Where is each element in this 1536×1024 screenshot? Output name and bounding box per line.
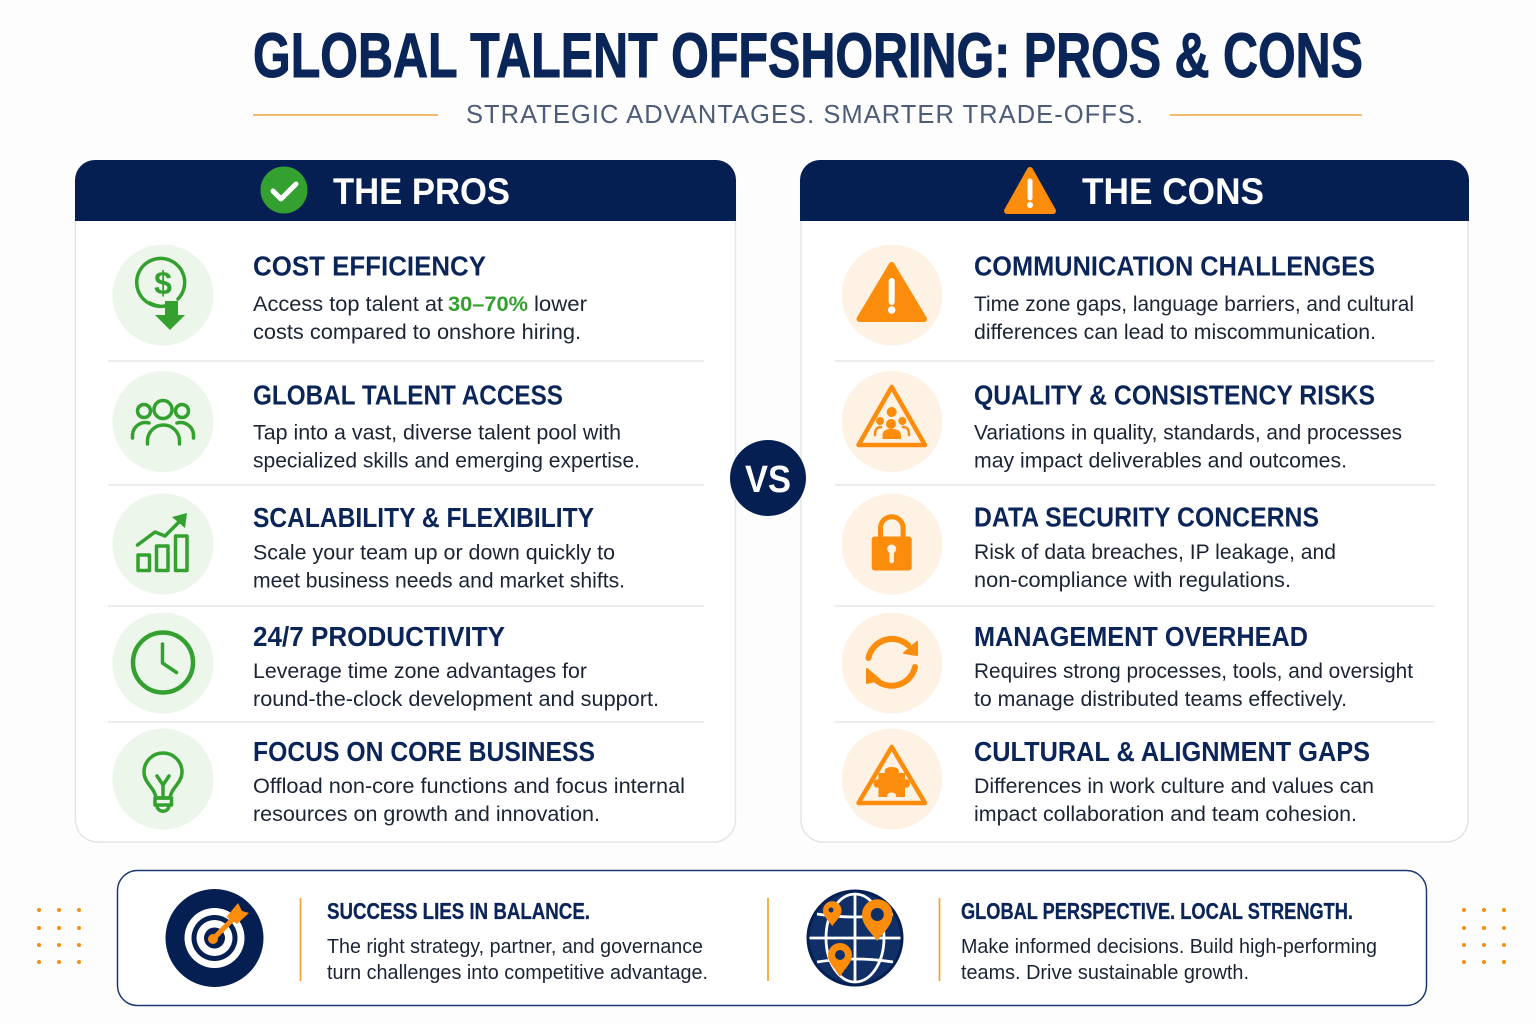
con item: management overhead: MANAGEMENT OVERHEAD [974, 621, 1308, 652]
callout: global perspective, local strength [961, 898, 1377, 984]
pro item: global talent access: Tap into a vast, diverse talent pool with [253, 420, 621, 444]
con item: communication challenges: Time zone gaps, language barriers, and cultural [974, 292, 1414, 316]
panel: the cons [800, 160, 1469, 842]
vs badge [730, 440, 806, 516]
icon: globe with location pins [807, 890, 903, 986]
pros header bar [75, 160, 736, 221]
con item: communication challenges: COMMUNICATION CHALLENGES [974, 250, 1375, 282]
pro item: 24/7 productivity: round-the-clock development and support. [253, 687, 659, 711]
callout: success lies in balance: SUCCESS LIES IN BALANCE. [327, 898, 590, 924]
pros header bar: THE PROS [333, 171, 510, 212]
pro item: 24/7 productivity [112, 612, 659, 714]
con item: data security concerns [842, 494, 1336, 594]
callout: global perspective, local strength: Make informed decisions. Build high-performing [961, 935, 1377, 958]
pro item: cost efficiency: Access top talent at [253, 292, 443, 316]
pro item: global talent access: specialized skills and emerging expertise. [253, 448, 640, 472]
pro item: scalability and flexibility: meet business needs and market shifts. [253, 568, 625, 592]
pro item: focus on core business: FOCUS ON CORE BUSINESS [253, 736, 595, 767]
pro item: scalability and flexibility: Scale your team up or down quickly to [253, 540, 615, 564]
pro item: focus on core business: resources on growth and innovation. [253, 802, 600, 826]
pro item: 24/7 productivity: 24/7 PRODUCTIVITY [253, 621, 505, 652]
pro item: cost efficiency: $ [154, 265, 172, 301]
con item: data security concerns: DATA SECURITY CONCERNS [974, 502, 1319, 532]
panel: the pros [75, 160, 736, 842]
pro item: global talent access [112, 371, 640, 472]
pro item: cost efficiency [112, 244, 587, 346]
con item: quality and consistency risks: QUALITY & CONSISTENCY RISKS [974, 380, 1375, 410]
con item: quality and consistency risks: Variations in quality, standards, and processes [974, 420, 1402, 444]
pro item: cost efficiency: costs compared to onshore hiring. [253, 320, 581, 344]
con item: communication challenges: differences can lead to miscommunication. [974, 320, 1376, 344]
pro item: cost efficiency: 30–70% [448, 292, 528, 316]
pro item: cost efficiency: COST EFFICIENCY [253, 250, 486, 282]
con item: communication challenges [842, 244, 1414, 346]
con item: quality and consistency risks [842, 371, 1402, 472]
pro item: cost efficiency: lower [534, 292, 587, 316]
con item: cultural and alignment gaps [842, 728, 1374, 830]
pro item: global talent access: GLOBAL TALENT ACCESS [253, 380, 563, 410]
callout: success lies in balance: The right strategy, partner, and governance [327, 935, 703, 958]
con item: management overhead [842, 612, 1413, 714]
callout: global perspective, local strength: teams. Drive sustainable growth. [961, 961, 1249, 984]
pro item: 24/7 productivity: Leverage time zone advantages for [253, 659, 587, 683]
con item: cultural and alignment gaps: CULTURAL & ALIGNMENT GAPS [974, 736, 1370, 767]
subtitle: STRATEGIC ADVANTAGES. SMARTER TRADE-OFFS. [466, 101, 1143, 129]
left dot pattern [37, 908, 81, 964]
pro item: scalability and flexibility: SCALABILITY & FLEXIBILITY [253, 502, 594, 533]
con item: management overhead: to manage distributed teams effectively. [974, 687, 1347, 711]
bottom banner [118, 870, 1426, 1006]
cons header bar [800, 160, 1469, 221]
con item: data security concerns: non-compliance with regulations. [974, 568, 1291, 592]
con item: management overhead: Requires strong processes, tools, and oversight [974, 659, 1413, 683]
con item: cultural and alignment gaps: impact collaboration and team cohesion. [974, 802, 1357, 826]
pro item: focus on core business [112, 728, 685, 830]
callout: success lies in balance [327, 898, 708, 984]
con item: data security concerns: Risk of data breaches, IP leakage, and [974, 540, 1336, 564]
con item: cultural and alignment gaps: Differences in work culture and values can [974, 774, 1374, 798]
callout: global perspective, local strength: GLOBAL PERSPECTIVE. LOCAL STRENGTH. [961, 898, 1353, 924]
right dot pattern [1462, 908, 1506, 964]
pro item: scalability and flexibility [112, 494, 625, 594]
icon: target with arrow [166, 889, 264, 987]
cons header bar: THE CONS [1082, 171, 1264, 212]
vs badge: VS [745, 459, 791, 501]
con item: quality and consistency risks: may impact deliverables and outcomes. [974, 448, 1347, 472]
pro item: focus on core business: Offload non-core functions and focus internal [253, 774, 685, 798]
callout: success lies in balance: turn challenges into competitive advantage. [327, 961, 708, 984]
